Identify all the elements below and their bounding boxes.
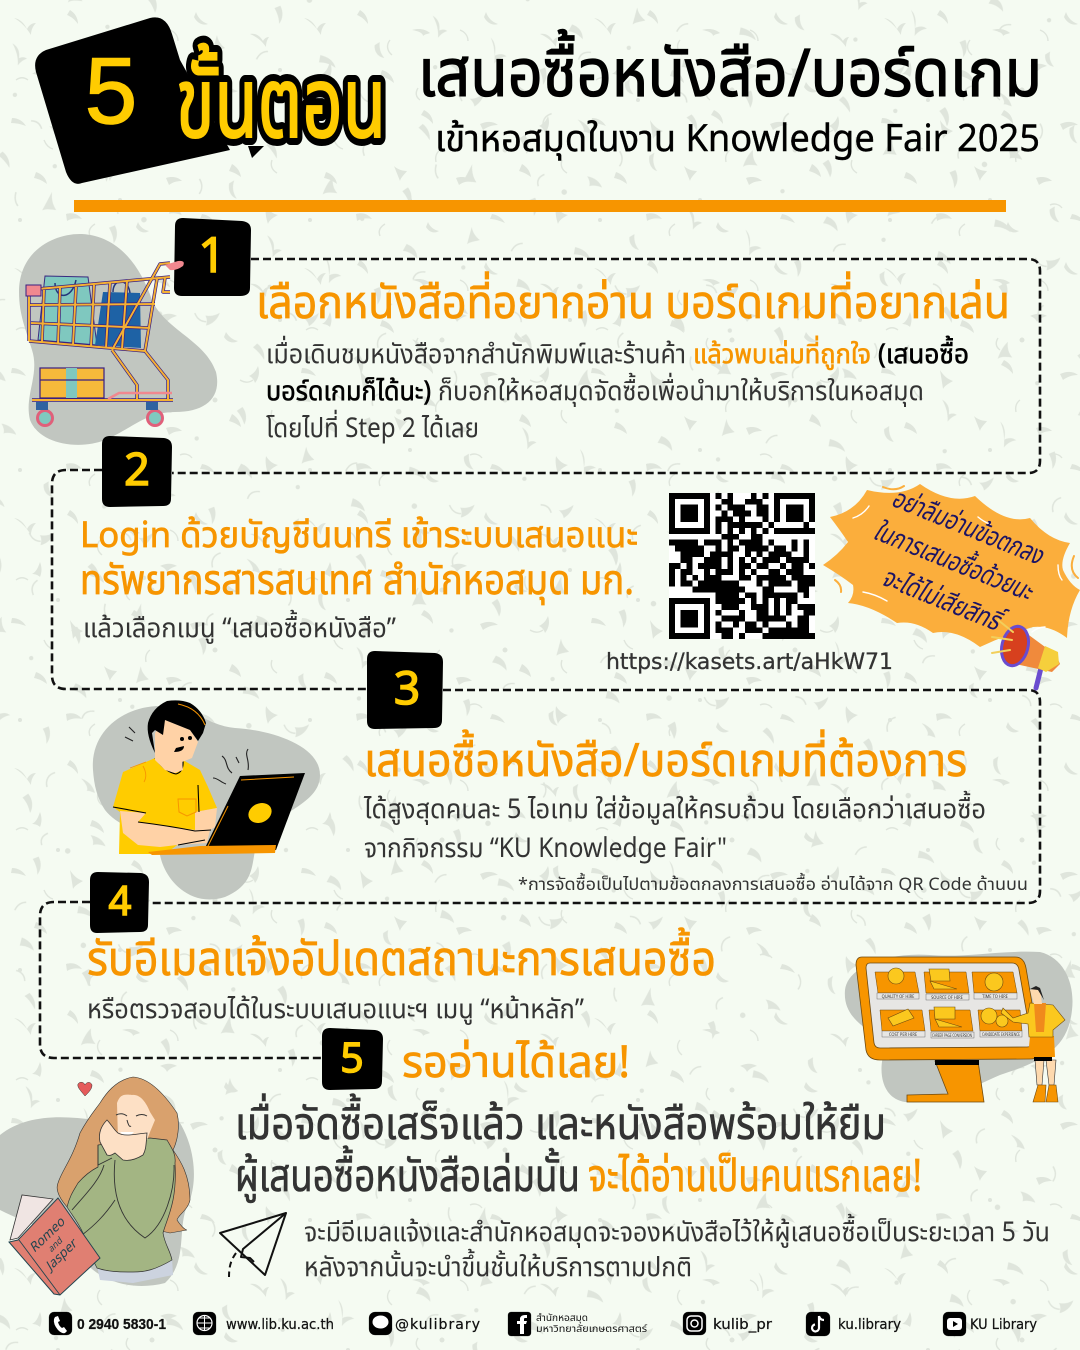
number badge 4: 4 (109, 873, 132, 933)
phone: 0 2940 5830-1 (77, 1316, 166, 1333)
step 2 heading: Login ด้วยบัญชีนนทรี เข้าระบบเสนอแนะ (80, 510, 638, 564)
step 2 body text: แล้วเลือกเมนู “เสนอซื้อหนังสือ” (83, 609, 396, 650)
illustration background blob: step 1 (19, 234, 217, 445)
number badge 3 (367, 651, 443, 729)
dashboard tiles (875, 972, 1022, 1031)
tiktok (806, 1312, 901, 1336)
bottom tray (108, 393, 172, 399)
hair (148, 700, 206, 753)
illustration: monitor dashboard with woman (856, 957, 1065, 1102)
step 3 body text: จากกิจกรรม “KU Knowledge Fair" (364, 829, 727, 870)
motion marks (125, 727, 248, 784)
step 2 heading: ทรัพยากรสารสนเทศ สำนักหอสมุด มก. (80, 551, 634, 613)
orange divider bar (74, 200, 1006, 212)
instagram: kulib_pr (713, 1317, 772, 1333)
forearms (120, 808, 217, 847)
tile icons (888, 968, 1008, 1027)
website: www.lib.ku.ac.th (226, 1317, 334, 1333)
icon: paper airplane (220, 1213, 286, 1277)
website (193, 1312, 334, 1335)
QR code (669, 493, 815, 639)
teal bag (38, 276, 97, 345)
dashed connector: step 4 frame (40, 902, 322, 1058)
youtube: KU Library (970, 1317, 1037, 1333)
step 5 main text (235, 1092, 922, 1212)
face (117, 1095, 155, 1140)
number badge 2 (102, 436, 172, 507)
illustration: happy woman with book (9, 1077, 190, 1295)
tile labels: CANDIDATE EXPERIENCE (982, 1032, 1020, 1038)
step 3 heading: เสนอซื้อหนังสือ/บอร์ดเกมที่ต้องการ (364, 727, 967, 797)
illustration: man with laptop (113, 700, 305, 855)
step 3 body text: ได้สูงสุดคนละ 5 ไอเทม ใส่ข้อมูลให้ครบถ้วน โดยเลือกว่าเสนอซื้อ (363, 790, 986, 831)
burst shape (823, 484, 1080, 647)
line (369, 1312, 480, 1335)
pink handle (165, 261, 184, 270)
book (9, 1195, 100, 1295)
tile labels: SOURCE OF HIRE (931, 995, 963, 1001)
tile labels: CAREER PAGE CONVERSION (932, 1033, 972, 1039)
cart box (40, 368, 104, 398)
hair (57, 1077, 190, 1233)
monitor stand (907, 1061, 984, 1102)
burst message: จะได้ไม่เสียสิทธิ์ (875, 558, 1012, 645)
tile label strips (877, 993, 1022, 1038)
number badge 5 (322, 1028, 383, 1091)
number 5: 5 (85, 38, 137, 143)
hands (99, 1120, 147, 1160)
instagram (683, 1312, 772, 1335)
burst message (867, 479, 1050, 645)
cart basket frame (27, 263, 173, 400)
step 1 body text: บอร์ดเกมก็ได้นะ) (266, 372, 431, 413)
book title (25, 1212, 83, 1277)
phone (49, 1312, 166, 1335)
dashed connector: step 2 frame (52, 470, 367, 689)
shirt pocket (178, 799, 196, 816)
blue bag (95, 292, 141, 348)
sweater folds (72, 1145, 174, 1238)
book title: Jasper (39, 1234, 83, 1277)
number badge 4 (90, 872, 149, 933)
black tilted box (35, 17, 230, 184)
facebook (508, 1310, 648, 1337)
word: steps: ขั้นตอน (176, 34, 386, 182)
step 5 heading: รออ่านได้เลย! (402, 1030, 630, 1097)
tile labels: QUALITY OF HIRE (882, 994, 914, 1000)
number badge 3: 3 (394, 655, 420, 725)
dashed connector: step 1 frame (172, 259, 1040, 473)
step 3 footnote: *การจัดซื้อเป็นไปตามข้อตกลงการเสนอซื้อ อ่านได้จาก QR Code ด้านบน (518, 872, 1028, 898)
number badge 2: 2 (124, 438, 150, 506)
step 1 body text: เมื่อเดินชมหนังสือจากสำนักพิมพ์และร้านค้า (266, 335, 686, 376)
heart (78, 1082, 92, 1096)
dashed connector: step 3 frame (149, 690, 1040, 903)
step 5 small text (304, 1213, 1050, 1289)
youtube (943, 1312, 1037, 1336)
number badge 5: 5 (340, 1029, 364, 1091)
number badge 1 (174, 218, 251, 296)
word outline: steps: ขั้นตอน (176, 34, 386, 182)
number badge 1: 1 (198, 221, 226, 294)
book title: Romeo (25, 1212, 71, 1257)
step 1 body text (266, 335, 969, 450)
icon: megaphone (992, 620, 1060, 688)
tile labels: TIME TO HIRE (982, 994, 1008, 1000)
book title: and (45, 1234, 67, 1256)
tile labels: COST PER HIRE (889, 1032, 917, 1038)
callout starburst (823, 479, 1080, 647)
illustration background blob: step 4 (845, 952, 1073, 1102)
tiktok: ku.library (838, 1317, 901, 1333)
line: @kulibrary (395, 1317, 480, 1333)
woman presenter (1001, 986, 1065, 1102)
step 4 heading: รับอีเมลแจ้งอัปเดตสถานะการเสนอซื้อ (87, 926, 716, 997)
step 5 main text: เมื่อจัดซื้อเสร็จแล้ว และหนังสือพร้อมให้ยืม (235, 1092, 886, 1160)
title badge: 5 steps (35, 17, 386, 184)
sweater (67, 1138, 175, 1272)
wheels (38, 410, 52, 426)
facebook: มหาวิทยาลัยเกษตรศาสตร์ (536, 1321, 648, 1337)
title line 2: เข้าหอสมุดในงาน Knowledge Fair 2025 (435, 112, 1040, 168)
step 1 body text: (เสนอซื้อ (878, 335, 969, 376)
illustration: shopping cart (26, 261, 184, 426)
laptop (203, 773, 305, 852)
title line 1: เสนอซื้อหนังสือ/บอร์ดเกม (418, 26, 1042, 126)
step 5 main text: จะได้อ่านเป็นคนแรกเลย! (588, 1144, 922, 1212)
face details (180, 737, 184, 741)
step 2 heading (80, 510, 638, 613)
step 5 small text: หลังจากนั้นจะนำขึ้นชั้นให้บริการตามปกติ (304, 1248, 692, 1289)
step 1 heading: เลือกหนังสือที่อยากอ่าน บอร์ดเกมที่อยากเล่น (256, 269, 1010, 339)
speech tail (248, 146, 264, 158)
QR URL: https://kasets.art/aHkW71 (606, 650, 893, 675)
neck and face (155, 720, 198, 773)
burst highlights (835, 486, 1078, 592)
facebook: สำนักหอสมุด (536, 1310, 588, 1326)
step 1 body text: โดยไปที่ Step 2 ได้เลย (266, 409, 479, 450)
step 1 body text: แล้วพบเล่มที่ถูกใจ (693, 335, 871, 376)
illustration background blob: step 3 (93, 706, 320, 899)
step 4 body text: หรือตรวจสอบได้ในระบบเสนอแนะฯ เมนู “หน้าหลัก” (87, 990, 584, 1031)
illustration background blob: step 5 (0, 1110, 194, 1286)
pants (97, 1258, 173, 1283)
monitor body (856, 957, 1040, 1060)
t-shirt (113, 758, 217, 854)
tile labels (882, 994, 1020, 1039)
footer contact row (49, 1310, 1037, 1337)
step 5 main text: ผู้เสนอซื้อหนังสือเล่มนั้น (235, 1144, 580, 1212)
step 1 body text: ก็บอกให้หอสมุดจัดซื้อเพื่อนำมาให้บริการในหอสมุด (438, 372, 924, 413)
step 3 body text (363, 790, 986, 870)
